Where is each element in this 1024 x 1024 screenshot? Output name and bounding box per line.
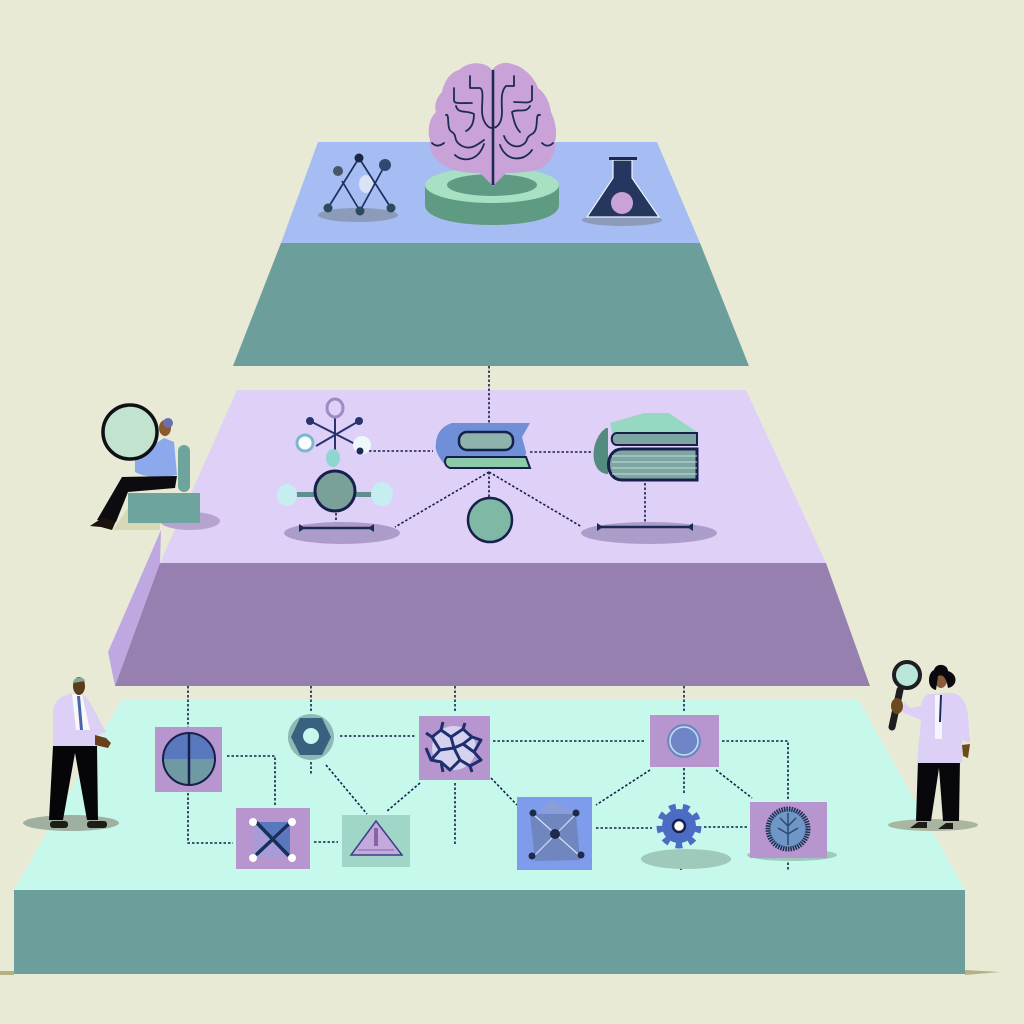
icon: brain xyxy=(429,63,556,186)
icon: quartered circle square xyxy=(155,727,222,792)
panel: middle tier xyxy=(108,390,870,686)
panel: top tier xyxy=(233,142,749,366)
icon: mesh square xyxy=(419,716,490,780)
figure: seated person with magnifier xyxy=(90,405,220,530)
icon: network graph xyxy=(318,154,398,222)
icon: molecule star xyxy=(297,399,371,467)
icon: blue gear on disc xyxy=(641,807,731,869)
icon: stacked books xyxy=(594,413,697,480)
icon: ring pedestal xyxy=(425,167,559,225)
dotted connectors: bottom tier xyxy=(188,686,788,870)
icon: circle node xyxy=(468,498,512,542)
icon: triangle square xyxy=(342,815,410,867)
figure: person with magnifier in lab coat xyxy=(888,662,978,831)
icon: crossed square xyxy=(236,808,310,869)
figure: person in shirt and tie xyxy=(23,677,119,831)
icon: arrow on disc xyxy=(581,522,717,544)
icon: circle square xyxy=(650,715,719,767)
panel: bottom tier xyxy=(0,699,1000,975)
icon: open book xyxy=(436,423,530,468)
icon: envelope square xyxy=(517,797,592,870)
dotted connectors: top to middle tier xyxy=(336,366,645,533)
icon: tree in spiked circle square xyxy=(747,802,837,861)
icon: circle node with arms xyxy=(277,471,400,544)
icon: flask xyxy=(582,157,662,226)
icon: teal gear xyxy=(288,714,334,760)
